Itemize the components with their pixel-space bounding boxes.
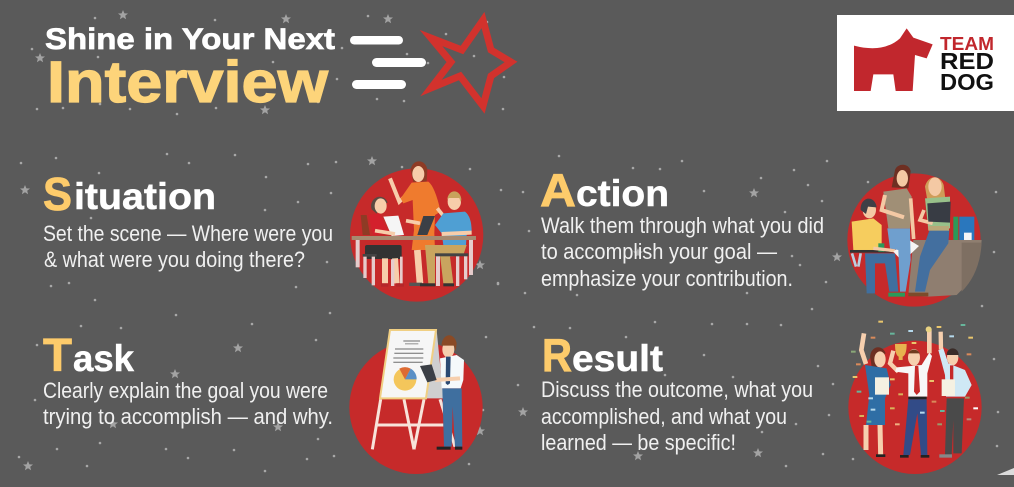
illustration: team celebrating — [848, 321, 982, 474]
heading: Result: esult — [572, 338, 663, 379]
man with trophy — [890, 326, 932, 458]
title — [45, 23, 335, 115]
logo wordmark: DOG — [940, 69, 994, 95]
seated man — [850, 199, 919, 297]
panel: action — [540, 164, 982, 307]
body text: result — [541, 377, 813, 455]
body text: result: accomplished, and what you — [541, 404, 787, 429]
body text: situation: Set the scene — Where were you — [43, 221, 333, 246]
man with certificate — [938, 332, 972, 458]
table and chairs — [352, 236, 476, 286]
heading: Action: A — [540, 164, 576, 216]
logo wordmark — [940, 34, 994, 95]
body text: result: learned — be specific! — [541, 430, 736, 455]
logo: Team Red Dog — [837, 15, 1014, 111]
easel legs — [372, 399, 455, 449]
laptop — [417, 216, 435, 235]
desk — [908, 240, 982, 297]
panel: task — [43, 329, 483, 474]
heading: Result: R — [542, 329, 572, 381]
heading: Task — [43, 329, 134, 381]
title line: Interview: Interview — [47, 50, 329, 115]
body text: situation: & what were you doing there? — [44, 247, 305, 272]
standing woman with laptop — [908, 177, 951, 296]
body text: action: Walk them through what you did — [541, 213, 824, 238]
woman in blue dress — [861, 333, 891, 457]
panel: situation — [43, 161, 483, 302]
seated man — [420, 191, 472, 286]
binders and mug — [953, 217, 974, 240]
standing woman — [882, 165, 914, 292]
logo wordmark: RED — [940, 48, 994, 74]
heading: Task: ask — [73, 338, 134, 379]
icon: red dog — [854, 28, 933, 91]
heading: Task: T — [43, 329, 72, 381]
flip chart — [380, 330, 436, 398]
heading: Situation: ituation — [74, 176, 216, 217]
presenter — [420, 335, 464, 450]
heading: Action: ction — [576, 173, 669, 214]
icon: shooting star — [350, 20, 511, 106]
body text: action: emphasize your contribution. — [541, 266, 793, 291]
body text: task: Clearly explain the goal you were — [43, 378, 328, 403]
seated woman — [361, 197, 404, 287]
trophy — [895, 344, 907, 360]
body text: action: to accomplish your goal — — [541, 239, 777, 264]
heading: Situation — [43, 168, 216, 220]
pie chart — [394, 367, 417, 391]
body text: task — [43, 378, 333, 429]
panel: result — [541, 321, 982, 474]
heading: Result — [542, 329, 663, 381]
body text: result: Discuss the outcome, what you — [541, 377, 813, 402]
logo wordmark: TEAM — [940, 34, 994, 54]
standing woman — [390, 161, 443, 286]
confetti — [851, 321, 978, 425]
body text: situation — [43, 221, 333, 272]
illustration: colleagues in discussion — [847, 165, 982, 307]
body text: task: trying to accomplish — and why. — [43, 404, 333, 429]
heading: Situation: S — [43, 168, 72, 220]
heading: Action — [540, 164, 669, 216]
title line: Shine in Your Next: Shine in Your Next — [45, 23, 335, 56]
body text: action — [541, 213, 824, 291]
illustration: team at a table — [350, 161, 483, 302]
illustration: man presenting a flip chart — [349, 330, 483, 474]
